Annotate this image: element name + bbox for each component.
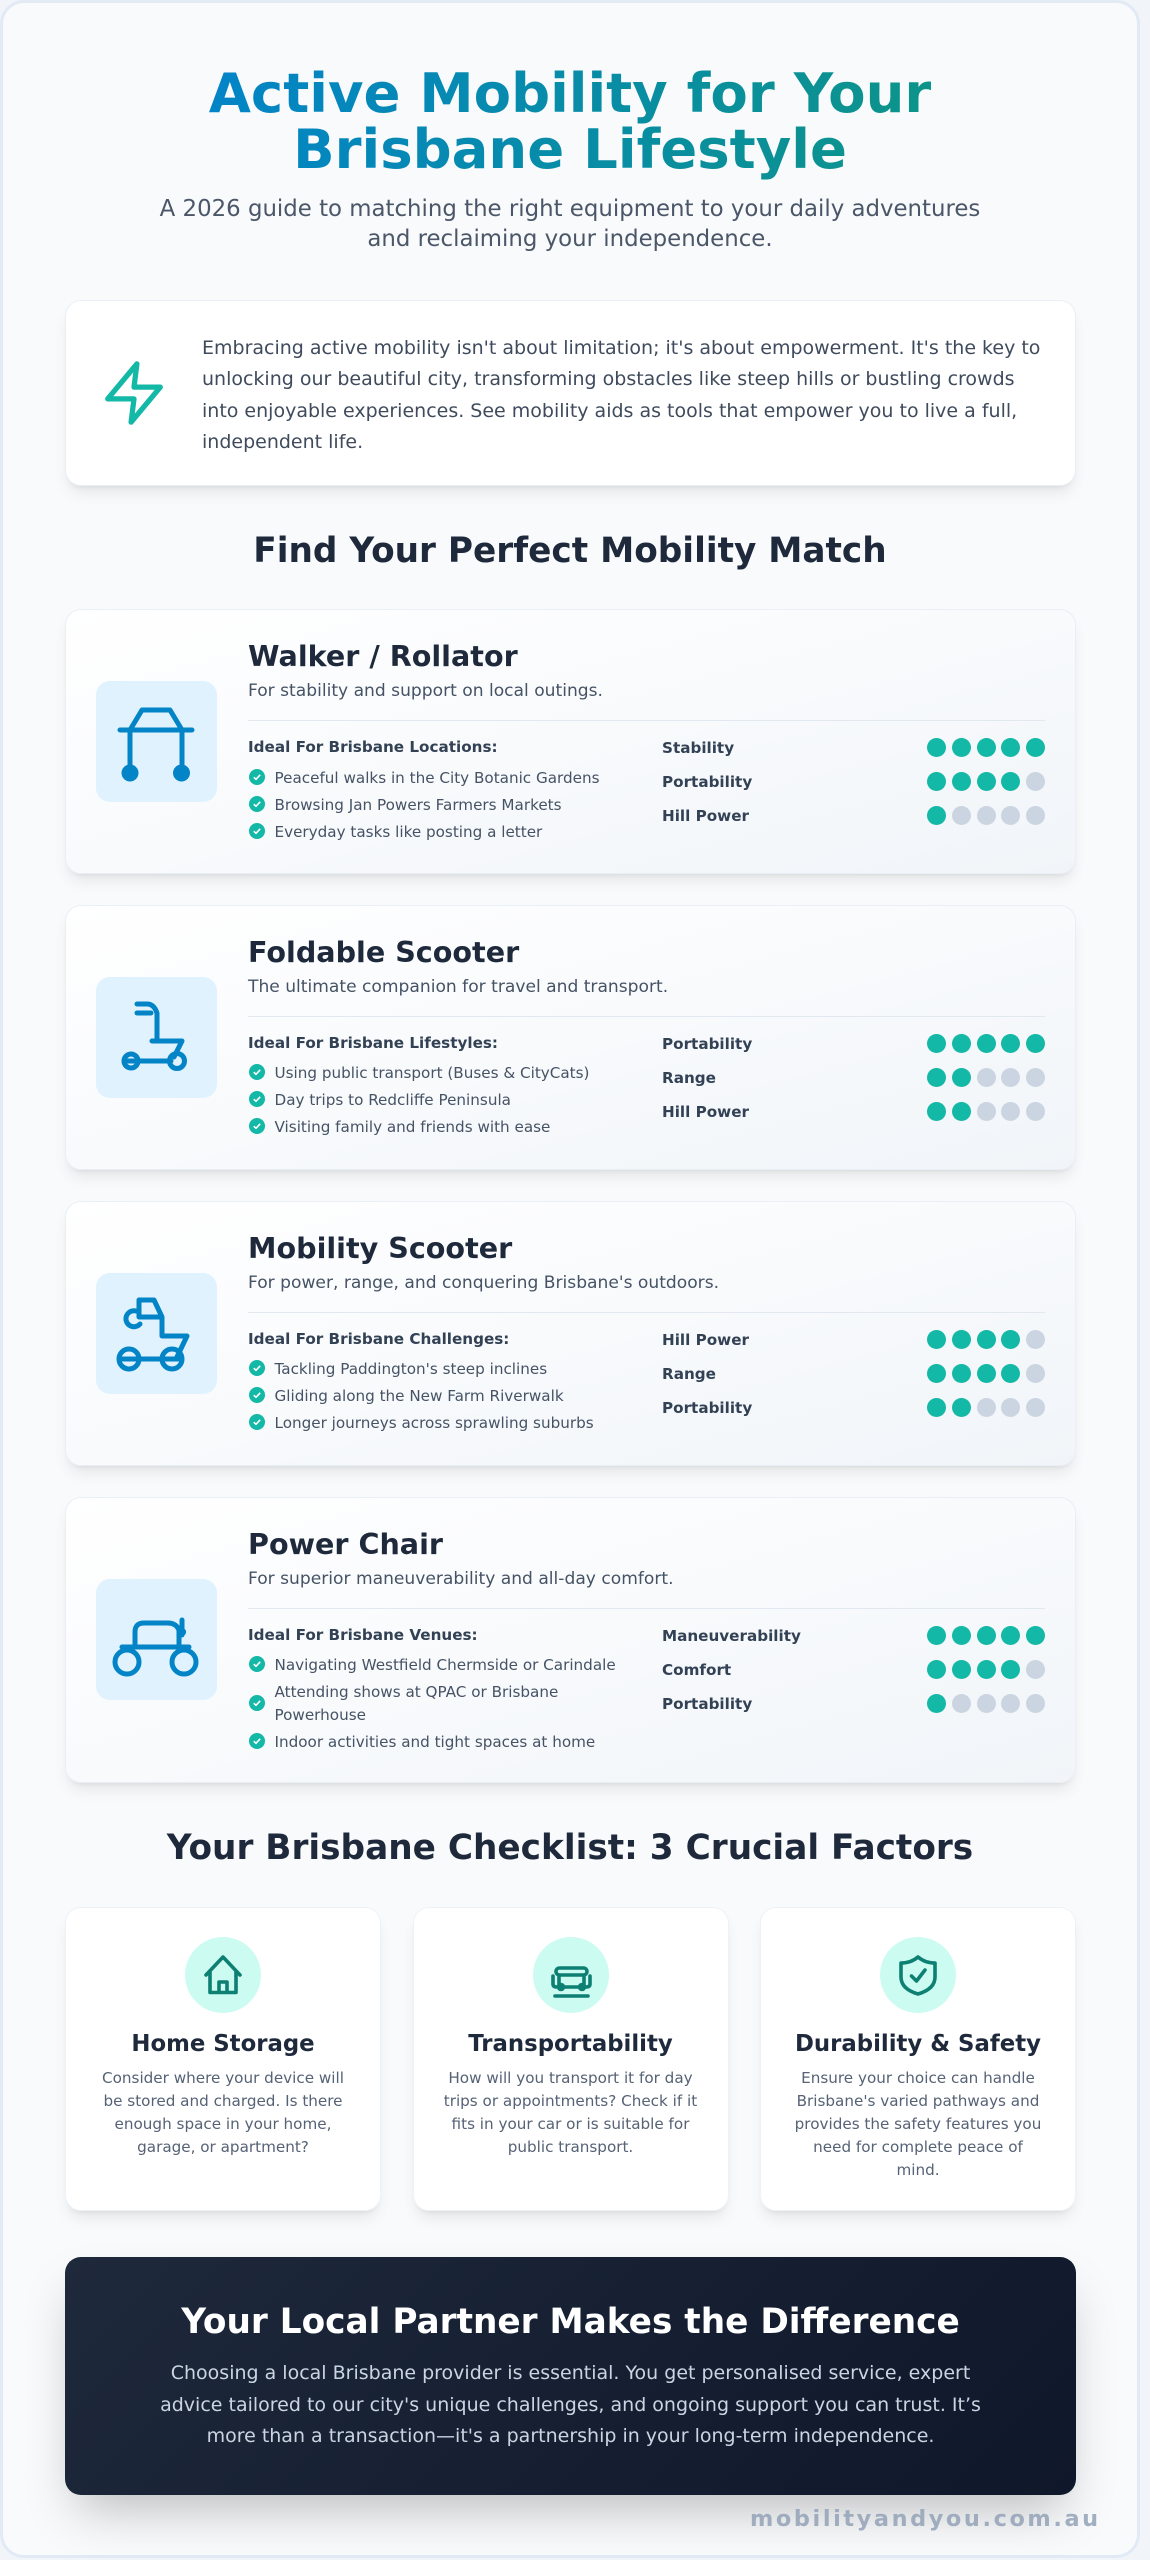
icon: lightning bolt xyxy=(105,361,163,425)
rating label: Comfort xyxy=(662,1660,731,1678)
rating label: Maneuverability xyxy=(662,1626,801,1644)
rating label: Hill Power xyxy=(662,1330,749,1348)
icon: car xyxy=(532,1937,608,2013)
ideal-for heading: Ideal For Brisbane Lifestyles: xyxy=(248,1034,498,1052)
panel: durability and safety xyxy=(760,1907,1076,2211)
icon: shield with check xyxy=(880,1937,956,2013)
title xyxy=(209,61,931,181)
factor body: mind. xyxy=(896,2161,940,2179)
panel: home storage xyxy=(65,1907,381,2211)
list item: Day trips to Redcliffe Peninsula xyxy=(274,1091,511,1109)
rating dots: 5 of 5 xyxy=(927,738,1045,757)
call to action body xyxy=(160,2362,981,2447)
rating label: Portability xyxy=(662,1398,752,1416)
device summary: For stability and support on local outings. xyxy=(248,681,603,701)
icon: foldable scooter xyxy=(96,976,217,1098)
device name: Mobility Scooter xyxy=(248,1230,512,1264)
panel: foldable scooter xyxy=(65,904,1076,1170)
rating dots: 5 of 5 xyxy=(927,1626,1045,1645)
ideal-for heading: Ideal For Brisbane Locations: xyxy=(248,738,498,756)
rating label: Portability xyxy=(662,1694,752,1712)
title: Brisbane Lifestyle xyxy=(293,117,847,181)
heading: checklist: Your Brisbane Checklist: 3 Crucial Factors xyxy=(167,1828,973,1868)
intro text: independent life. xyxy=(202,431,363,453)
heading: find your match: Find Your Perfect Mobility Match xyxy=(253,531,887,571)
rating label: Portability xyxy=(662,773,752,791)
icon: walker xyxy=(96,681,217,802)
device summary: The ultimate companion for travel and transport. xyxy=(248,976,668,996)
factor title: Durability & Safety xyxy=(795,2031,1041,2057)
list item: Powerhouse xyxy=(274,1706,366,1724)
icon: mobility scooter xyxy=(96,1272,217,1394)
list item xyxy=(249,1683,558,1724)
list item: Navigating Westfield Chermside or Carindale xyxy=(274,1656,616,1674)
intro text xyxy=(202,337,1040,453)
call to action body: advice tailored to our city's unique challenges, and ongoing support you can trust. It’s xyxy=(160,2394,981,2416)
rating dots: 4 of 5 xyxy=(927,1330,1045,1349)
factor body xyxy=(102,2069,344,2156)
call to action heading: Your Local Partner Makes the Difference xyxy=(181,2302,960,2342)
list item: Attending shows at QPAC or Brisbane xyxy=(274,1683,558,1701)
rating dots: 2 of 5 xyxy=(927,1068,1045,1087)
panel: intro xyxy=(65,300,1076,486)
factor body xyxy=(795,2069,1041,2179)
factor body: public transport. xyxy=(508,2138,633,2156)
subtitle: and reclaiming your independence. xyxy=(367,226,773,252)
rating dots: 4 of 5 xyxy=(927,1660,1045,1679)
list item: Gliding along the New Farm Riverwalk xyxy=(274,1387,564,1405)
factor body: Consider where your device will xyxy=(102,2069,344,2087)
rating label: Range xyxy=(662,1364,716,1382)
subtitle: A 2026 guide to matching the right equipment to your daily adventures xyxy=(160,196,980,222)
device name: Walker / Rollator xyxy=(248,639,518,673)
list item: Indoor activities and tight spaces at home xyxy=(274,1732,595,1750)
rating dots: 4 of 5 xyxy=(927,772,1045,791)
intro text: Embracing active mobility isn't about limitation; it's about empowerment. It's the key to xyxy=(202,337,1040,359)
call to action body: Choosing a local Brisbane provider is essential. You get personalised service, expert xyxy=(171,2362,970,2384)
panel: power chair xyxy=(65,1496,1076,1783)
rating label: Hill Power xyxy=(662,807,749,825)
device summary: For power, range, and conquering Brisbane's outdoors. xyxy=(248,1272,719,1292)
factor body: Brisbane's varied pathways and xyxy=(797,2092,1039,2110)
title: Active Mobility for Your xyxy=(209,61,931,125)
panel: local partner call to action xyxy=(65,2257,1076,2495)
factor body: provides the safety features you xyxy=(795,2115,1041,2133)
list item: Browsing Jan Powers Farmers Markets xyxy=(274,796,562,814)
rating label: Range xyxy=(662,1068,716,1086)
call to action body: more than a transaction—it's a partnership in your long-term independence. xyxy=(207,2425,934,2447)
factor body: How will you transport it for day xyxy=(448,2069,693,2087)
subtitle xyxy=(160,196,980,252)
intro text: into enjoyable experiences. See mobility aids as tools that empower you to live a full, xyxy=(202,400,1017,422)
factor title: Home Storage xyxy=(131,2031,315,2057)
rating dots: 4 of 5 xyxy=(927,1364,1045,1383)
footer website: mobilityandyou.com.au xyxy=(750,2506,1101,2532)
list item: Longer journeys across sprawling suburbs xyxy=(274,1414,594,1432)
factor body: be stored and charged. Is there xyxy=(103,2092,343,2110)
factor body: need for complete peace of xyxy=(813,2138,1023,2156)
icon: house xyxy=(185,1937,261,2013)
rating dots: 2 of 5 xyxy=(927,1102,1045,1121)
factor body: garage, or apartment? xyxy=(137,2138,309,2156)
rating dots: 5 of 5 xyxy=(927,1034,1045,1053)
factor title: Transportability xyxy=(468,2031,673,2057)
factor body: Ensure your choice can handle xyxy=(801,2069,1035,2087)
panel: mobility scooter xyxy=(65,1200,1076,1466)
rating dots: 1 of 5 xyxy=(927,806,1045,825)
list item: Visiting family and friends with ease xyxy=(274,1118,550,1136)
device summary: For superior maneuverability and all-day comfort. xyxy=(248,1568,674,1588)
header xyxy=(160,61,980,252)
list item: Using public transport (Buses & CityCats) xyxy=(274,1064,589,1082)
rating dots: 2 of 5 xyxy=(927,1398,1045,1417)
factor body: enough space in your home, xyxy=(115,2115,331,2133)
rating label: Hill Power xyxy=(662,1102,749,1120)
ideal-for heading: Ideal For Brisbane Challenges: xyxy=(248,1330,509,1348)
panel: transportability xyxy=(412,1907,728,2211)
list item: Peaceful walks in the City Botanic Gardens xyxy=(274,768,600,786)
icon: power chair xyxy=(96,1578,217,1700)
rating dots: 1 of 5 xyxy=(927,1694,1045,1713)
factor body xyxy=(444,2069,697,2156)
list item: Tackling Paddington's steep inclines xyxy=(274,1360,547,1378)
panel: walker / rollator xyxy=(65,609,1076,874)
ideal-for heading: Ideal For Brisbane Venues: xyxy=(248,1626,478,1644)
factor body: fits in your car or is suitable for xyxy=(452,2115,689,2133)
device name: Foldable Scooter xyxy=(248,934,519,968)
factor body: trips or appointments? Check if it xyxy=(444,2092,697,2110)
rating label: Stability xyxy=(662,739,734,757)
intro text: unlocking our beautiful city, transforming obstacles like steep hills or bustling crowds xyxy=(202,368,1015,390)
device name: Power Chair xyxy=(248,1526,443,1560)
rating label: Portability xyxy=(662,1034,752,1052)
list item: Everyday tasks like posting a letter xyxy=(274,822,542,840)
